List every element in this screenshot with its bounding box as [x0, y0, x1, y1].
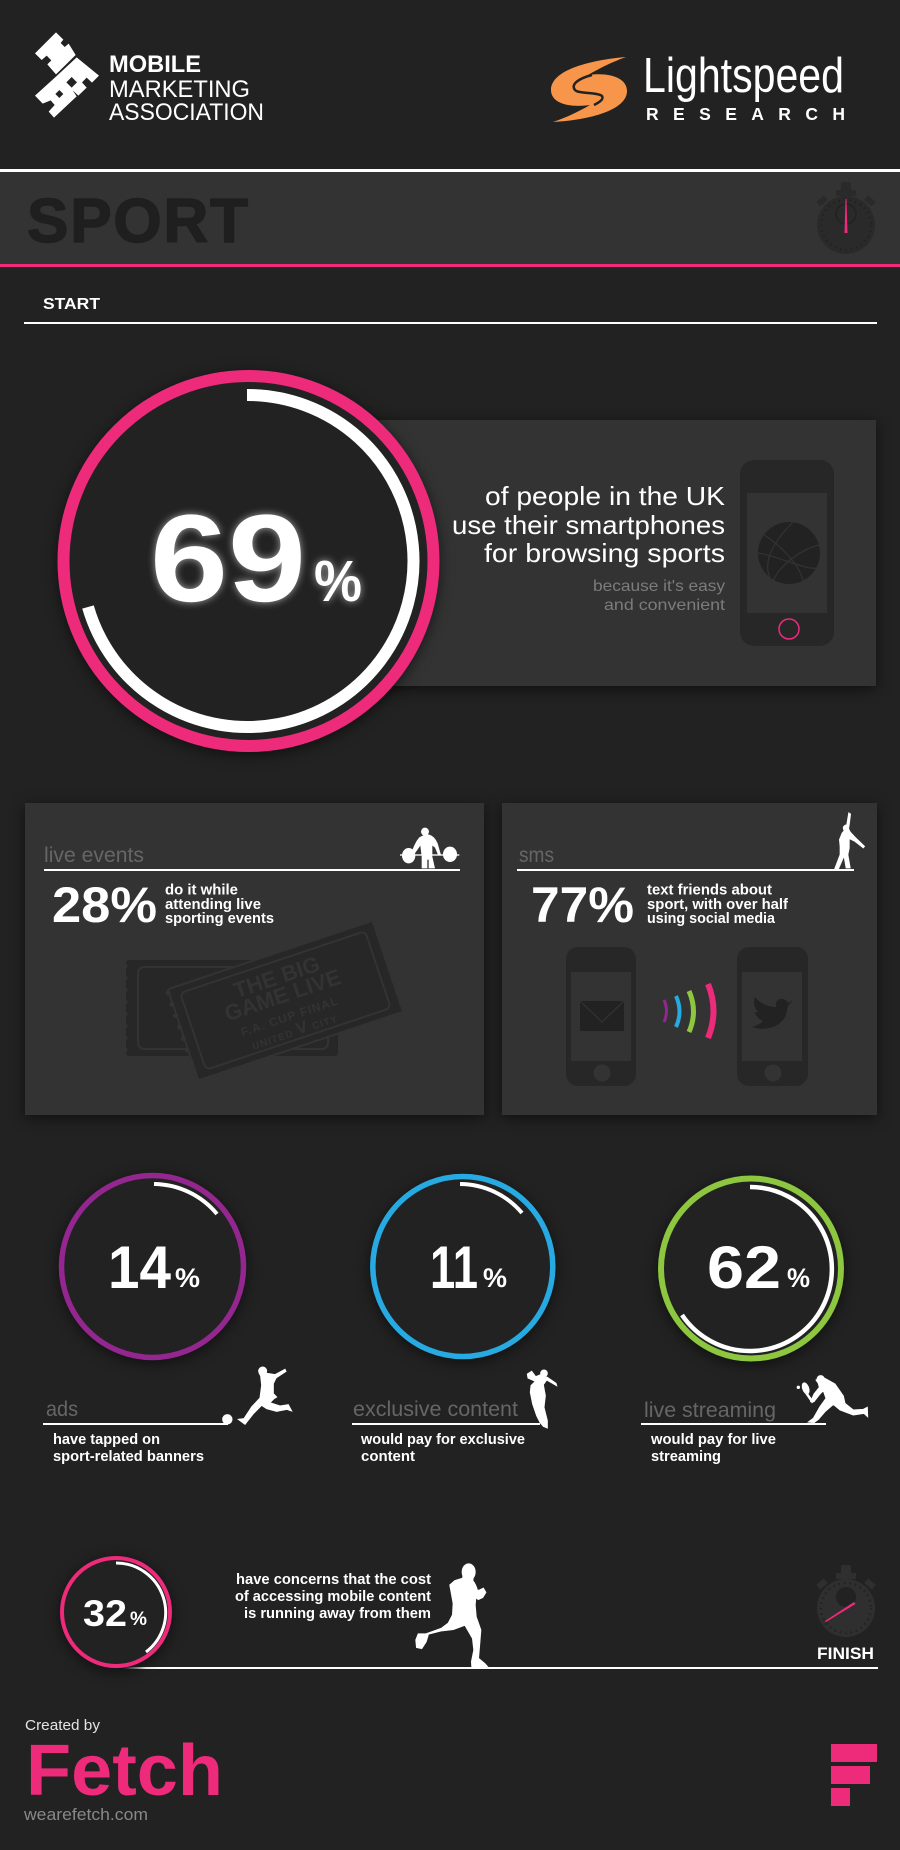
- number: 32%: [83, 1593, 147, 1634]
- icon: runner: [416, 1564, 487, 1667]
- logo: Lightspeed Research: RESEARCH: [646, 104, 845, 124]
- text: of people in the UK: use their smartphones: [452, 510, 725, 540]
- number: 62%: 62: [707, 1234, 781, 1301]
- text: would pay for live: would pay for live: [650, 1431, 776, 1448]
- text: text friends about sport: sport, with over half: [647, 896, 789, 913]
- text: do it while attending: [165, 882, 274, 927]
- icon: Fetch F mark: [831, 1744, 877, 1806]
- number: 69%: [150, 490, 362, 628]
- panel: sms: [502, 803, 877, 1115]
- text: have tapped: have tapped on: [53, 1431, 160, 1448]
- icon: back ticket: [125, 960, 338, 1056]
- icon: gymnast: [835, 813, 865, 869]
- icon: weightlifter: [400, 828, 459, 868]
- label: FINISH: FINISH: [817, 1644, 874, 1663]
- text: have concerns: have concerns that the cost: [236, 1571, 431, 1588]
- icon: orange swirl: [551, 57, 627, 122]
- number: 32%: %: [130, 1609, 147, 1630]
- stat: 28%: 28%: [52, 877, 157, 933]
- icon: phone with basketball: [740, 460, 834, 646]
- block: ads: ads: [46, 1398, 78, 1421]
- text: have tapped: [53, 1431, 204, 1465]
- START label: START: [43, 296, 100, 313]
- text: have concerns: [235, 1571, 431, 1622]
- icon: MMA mark: [35, 32, 99, 118]
- text: text friends about sport: [647, 882, 789, 927]
- chart: 62% live streaming ring: [661, 1178, 841, 1358]
- number: 14%: %: [175, 1263, 200, 1293]
- icon: front ticket: GAME LIVE: [221, 964, 344, 1026]
- text: of people in the UK: [452, 481, 726, 568]
- footer: created by Fetch: Created by: [25, 1717, 101, 1734]
- logo: Lightspeed Research: [551, 49, 845, 124]
- text: text friends about sport: text friends about: [647, 882, 772, 898]
- stat: 77%: 77%: [531, 877, 634, 933]
- text: would pay for live: [650, 1431, 776, 1465]
- logo: Lightspeed Research: Lightspeed: [643, 49, 844, 103]
- text: have concerns: is running away from them: [244, 1605, 431, 1622]
- icon: stopwatch at finish: [816, 1565, 876, 1637]
- heading: SPORT: SPORT: [27, 187, 248, 256]
- block: ads: [43, 1367, 292, 1465]
- chart: 32% ring: [62, 1558, 170, 1666]
- number: 11%: %: [483, 1263, 507, 1293]
- chart: 14% ads ring: [62, 1176, 244, 1358]
- text: have tapped: sport-related banners: [53, 1448, 204, 1465]
- logo: Mobile Marketing Association: [35, 32, 264, 126]
- text: do it while attending: attending live: [165, 896, 261, 913]
- block: exclusive content: exclusive content: [353, 1398, 518, 1421]
- number: 69%: 69: [150, 490, 306, 628]
- icon: golfer: [527, 1370, 557, 1428]
- chart: 11% exclusive content ring: [373, 1176, 553, 1356]
- icon: front ticket: THE BIG: [230, 951, 323, 1003]
- text: because it's easy: [593, 578, 726, 614]
- footer: created by Fetch: Fetch: [26, 1731, 223, 1811]
- icon: phone with envelope: [566, 947, 636, 1086]
- panel: smartphones browsing: [300, 420, 876, 686]
- heading: live events: live events: [44, 844, 144, 867]
- number: 14%: 14: [108, 1234, 172, 1301]
- logo: Mobile Marketing Association: MARKETING: [109, 76, 250, 103]
- number: 69%: %: [314, 549, 362, 614]
- text: because it's easy: and convenient: [604, 597, 726, 614]
- text: of people in the UK: of people in the UK: [485, 481, 726, 511]
- header band: [0, 169, 900, 267]
- logo: Mobile Marketing Association: MOBILE: [109, 51, 201, 78]
- chart: 69% ring: [64, 376, 434, 746]
- panel: live events: [25, 803, 484, 1115]
- text: would pay for exclusive: content: [361, 1448, 415, 1465]
- text: because it's easy: because it's easy: [593, 578, 725, 595]
- icon: front ticket: [167, 920, 404, 1081]
- text: would pay for exclusive: [360, 1431, 525, 1465]
- block: live streaming: live streaming: [644, 1399, 776, 1422]
- finish track line: [123, 1667, 878, 1669]
- icon: front ticket: F.A. CUP FINAL: [239, 994, 341, 1039]
- logo: Mobile Marketing Association: ASSOCIATION: [109, 99, 264, 126]
- icon: stopwatch at start: [816, 182, 876, 254]
- text: do it while attending: sporting events: [165, 910, 274, 927]
- number: 62%: %: [787, 1263, 810, 1293]
- text: of people in the UK: for browsing sports: [484, 538, 725, 568]
- icon: footballer kicking: [223, 1367, 292, 1424]
- text: would pay for exclusive: would pay for exclusive: [360, 1431, 525, 1448]
- heading: sms: sms: [519, 844, 554, 867]
- icon: tennis player: [797, 1376, 868, 1423]
- number: 11%: 11: [430, 1234, 478, 1301]
- number: 32%: 32: [83, 1593, 127, 1634]
- text: do it while attending: do it while: [165, 882, 238, 898]
- block: live streaming: [641, 1376, 868, 1465]
- number: 62%: [707, 1234, 810, 1301]
- icon: signal arcs: [664, 984, 714, 1038]
- text: would pay for live: streaming: [651, 1448, 721, 1465]
- text: text friends about sport: using social media: [647, 910, 776, 927]
- icon: front ticket: UNITED V CITY: [249, 1007, 340, 1053]
- footer: created by Fetch: wearefetch.com: [23, 1805, 148, 1824]
- text: have concerns: of accessing mobile content: [235, 1588, 431, 1605]
- icon: phone with twitter bird: [737, 947, 808, 1086]
- block: exclusive content: [352, 1370, 557, 1465]
